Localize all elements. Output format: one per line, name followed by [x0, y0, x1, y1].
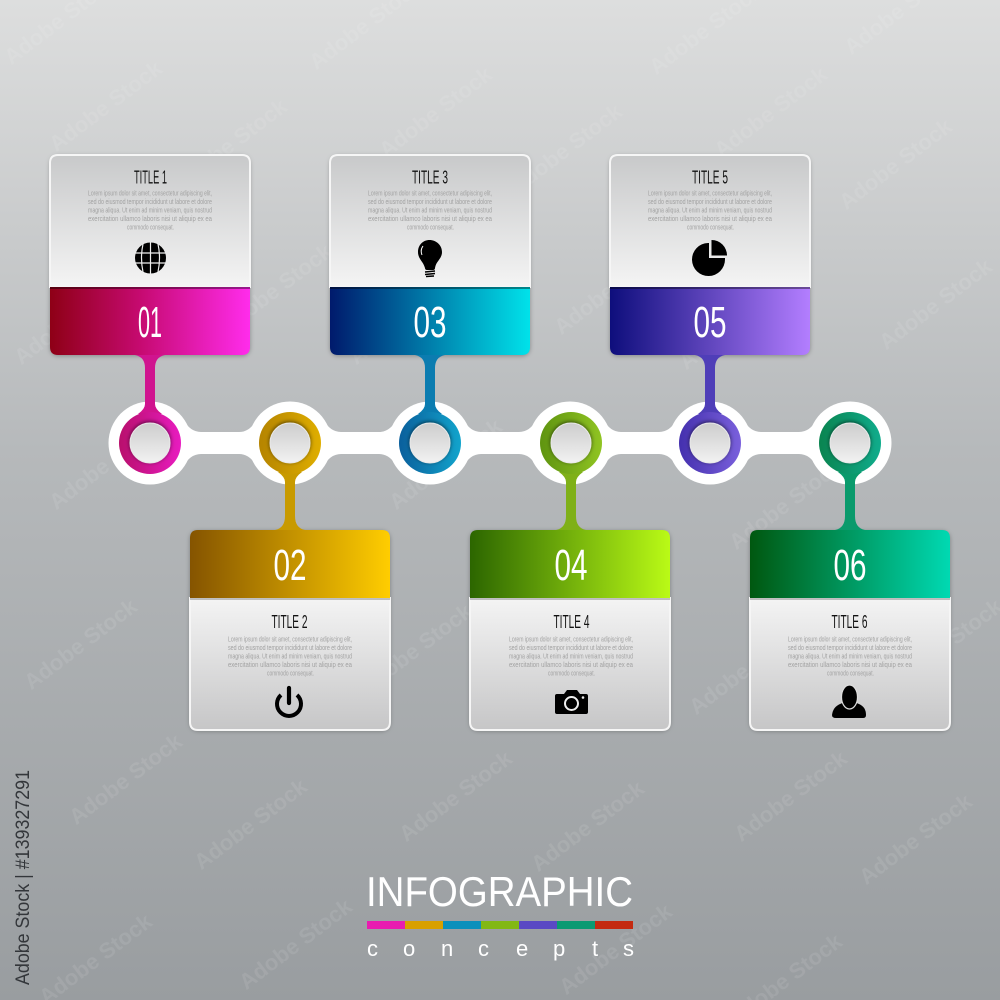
body text — [368, 188, 493, 232]
title: TITLE 5 — [692, 168, 728, 188]
body text: commodo consequat. — [827, 668, 874, 678]
body text: magna aliqua. Ut enim ad minim veniam, quis nostrud — [509, 652, 633, 660]
panel: step 05 — [610, 155, 810, 355]
text: Adobe Stock — [504, 98, 627, 199]
panel: step 01 — [50, 155, 250, 355]
text: Adobe Stock — [189, 773, 312, 874]
body text: exercitation ullamco laboris nisi ut aliquip ex ea — [368, 214, 493, 223]
text: Adobe Stock — [184, 513, 307, 614]
body text: commodo consequat. — [687, 222, 734, 232]
text: Adobe Stock — [724, 453, 847, 554]
body text: sed do eiusmod tempor incididunt ut labore et dolore — [648, 197, 772, 206]
node 1 — [119, 355, 181, 474]
icon: pie chart — [692, 240, 727, 276]
text: Adobe Stock — [674, 273, 797, 374]
text: Adobe Stock — [169, 93, 292, 194]
body text: sed do eiusmod tempor incididunt ut labore et dolore — [228, 643, 352, 652]
colour band — [610, 287, 810, 355]
text: Adobe Stock — [554, 898, 677, 999]
panel: step 01: 01 — [138, 298, 162, 347]
colour band — [190, 530, 390, 598]
body text: sed do eiusmod tempor incididunt ut labore et dolore — [509, 643, 633, 652]
body text — [88, 188, 213, 232]
node 2 — [259, 412, 321, 530]
title: TITLE 4 — [554, 612, 590, 632]
number: 06 — [834, 541, 866, 590]
body text — [648, 188, 773, 232]
icon: power — [277, 688, 301, 716]
text: Adobe Stock — [874, 253, 997, 354]
body text: magna aliqua. Ut enim ad minim veniam, quis nostrud — [788, 652, 912, 660]
card body — [750, 530, 950, 730]
icon: camera — [555, 690, 588, 714]
icon: user — [832, 685, 866, 718]
text: Adobe Stock — [214, 238, 337, 339]
body text: commodo consequat. — [127, 222, 174, 232]
rainbow bar — [367, 921, 633, 929]
panel: step 03 — [330, 155, 530, 355]
body text: exercitation ullamco laboris nisi ut aliquip ex ea — [88, 214, 213, 223]
text: Adobe Stock — [234, 893, 357, 994]
number: 05 — [694, 298, 726, 347]
text: Adobe Stock — [834, 113, 957, 214]
timeline track — [108, 402, 892, 484]
number: 02 — [274, 541, 306, 590]
number: 04 — [554, 541, 588, 590]
colour band — [750, 530, 950, 598]
colour band — [50, 287, 250, 355]
text: Adobe Stock — [549, 238, 672, 339]
text: Adobe Stock — [526, 775, 649, 876]
icon: globe — [135, 242, 166, 274]
text: Adobe Stock — [684, 618, 807, 719]
text: Adobe Stock — [64, 728, 187, 829]
card body — [470, 530, 670, 730]
panel: step 06 — [750, 530, 950, 730]
body text: Lorem ipsum dolor sit amet, consectetur adipiscing elit, — [648, 188, 772, 198]
title: TITLE 3 — [412, 168, 448, 188]
body text: magna aliqua. Ut enim ad minim veniam, quis nostrud — [648, 206, 772, 214]
text: Adobe Stock — [19, 593, 142, 694]
card body — [50, 155, 250, 355]
body text — [228, 634, 353, 678]
text: Adobe Stock — [729, 745, 852, 846]
colour band — [330, 287, 530, 355]
body text — [509, 634, 634, 678]
body text: Lorem ipsum dolor sit amet, consectetur adipiscing elit, — [788, 634, 912, 644]
node 3 — [399, 355, 461, 474]
text: Adobe Stock — [374, 61, 497, 162]
text: Adobe Stock — [709, 61, 832, 162]
title: TITLE 6 — [832, 612, 868, 632]
panel: step 02 — [190, 530, 390, 730]
body text: magna aliqua. Ut enim ad minim veniam, quis nostrud — [88, 206, 212, 214]
body text: commodo consequat. — [407, 222, 454, 232]
text: Adobe Stock — [344, 268, 467, 369]
text: Adobe Stock — [384, 413, 507, 514]
colour band — [470, 530, 670, 598]
text: Adobe Stock — [9, 268, 132, 369]
node 6 — [819, 412, 881, 530]
text: Adobe Stock — [44, 413, 167, 514]
body text: Lorem ipsum dolor sit amet, consectetur adipiscing elit, — [88, 188, 212, 198]
body text: exercitation ullamco laboris nisi ut aliquip ex ea — [648, 214, 773, 223]
node 5 — [679, 355, 741, 474]
panel: step 04 — [470, 530, 670, 730]
node 4 — [540, 412, 602, 530]
footer subtitle: concepts — [367, 936, 634, 961]
footer title: INFOGRAPHIC — [366, 868, 633, 915]
title: TITLE 1 — [134, 168, 167, 188]
number: 03 — [414, 298, 446, 347]
text: Adobe Stock — [519, 533, 642, 634]
body text: exercitation ullamco laboris nisi ut aliquip ex ea — [788, 660, 913, 669]
body text: magna aliqua. Ut enim ad minim veniam, quis nostrud — [368, 206, 492, 214]
body text: sed do eiusmod tempor incididunt ut labore et dolore — [368, 197, 492, 206]
body text — [788, 634, 913, 678]
body text: sed do eiusmod tempor incididunt ut labore et dolore — [788, 643, 912, 652]
body text: commodo consequat. — [267, 668, 314, 678]
stock id: Adobe Stock | #139327291 — [13, 770, 34, 985]
card body — [610, 155, 810, 355]
text: Adobe Stock — [394, 745, 517, 846]
body text: commodo consequat. — [548, 668, 595, 678]
body text: exercitation ullamco laboris nisi ut aliquip ex ea — [509, 660, 634, 669]
body text: Lorem ipsum dolor sit amet, consectetur adipiscing elit, — [228, 634, 352, 644]
body text: Lorem ipsum dolor sit amet, consectetur adipiscing elit, — [368, 188, 492, 198]
body text: magna aliqua. Ut enim ad minim veniam, quis nostrud — [228, 652, 352, 660]
text: Adobe Stock — [354, 598, 477, 699]
card body — [330, 155, 530, 355]
title: TITLE 2 — [272, 612, 308, 632]
body text: Lorem ipsum dolor sit amet, consectetur adipiscing elit, — [509, 634, 633, 644]
card body — [190, 530, 390, 730]
body text: sed do eiusmod tempor incididunt ut labore et dolore — [88, 197, 212, 206]
body text: exercitation ullamco laboris nisi ut aliquip ex ea — [228, 660, 353, 669]
text: Adobe Stock — [854, 788, 977, 889]
icon: light bulb — [418, 240, 442, 276]
text: Adobe Stock — [44, 55, 167, 156]
